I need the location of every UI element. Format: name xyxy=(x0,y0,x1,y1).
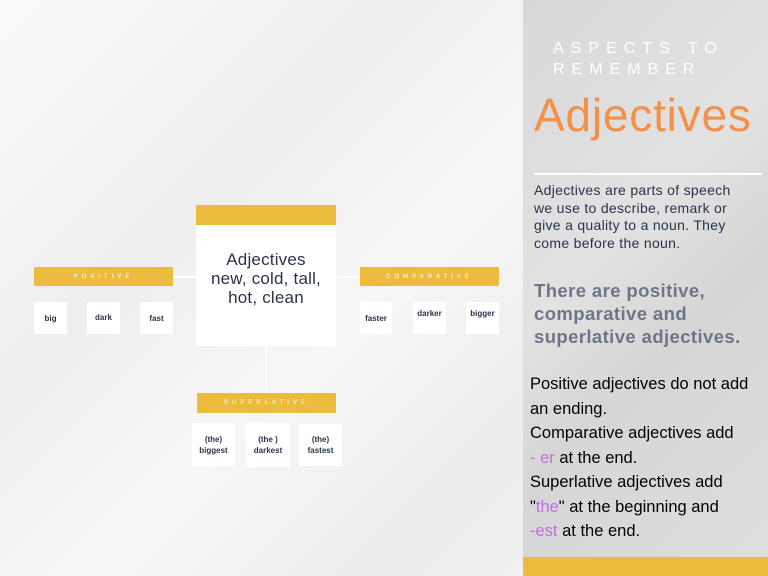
center header bar xyxy=(196,205,336,225)
definition: we use to describe, remark or xyxy=(534,200,727,216)
positive: fast xyxy=(140,302,173,334)
superlative label xyxy=(197,393,336,413)
positive: big: big xyxy=(44,314,56,322)
types statement xyxy=(534,280,741,347)
rules: Comparative adjectives add xyxy=(530,424,734,442)
comparative: darker xyxy=(413,302,446,334)
center text xyxy=(211,250,321,307)
comparative label: COMPARATIVE xyxy=(386,274,473,280)
divider xyxy=(534,173,762,175)
superlative label: SUPERLATIVE xyxy=(224,400,309,406)
comparative: bigger: bigger xyxy=(470,309,495,318)
types statement: There are positive, xyxy=(534,280,705,301)
definition: come before the noun. xyxy=(534,234,680,250)
superlative: biggest xyxy=(192,423,235,466)
center text: new, cold, tall, xyxy=(211,269,321,288)
center card xyxy=(196,205,336,346)
comparative: darker: darker xyxy=(417,309,442,318)
subtitle: ASPECTS TO xyxy=(553,40,724,57)
right panel xyxy=(523,0,768,576)
types statement: superlative adjectives. xyxy=(534,326,741,347)
subtitle xyxy=(553,40,724,78)
superlative: fastest: (the) xyxy=(312,435,329,444)
rules: -est at the end. xyxy=(530,522,640,540)
superlative: biggest: (the) xyxy=(205,434,222,444)
rules: "the" at the beginning and xyxy=(530,498,719,516)
comparative: faster: faster xyxy=(365,314,387,323)
connector: right xyxy=(336,276,360,278)
comparative label xyxy=(360,267,499,286)
positive: big xyxy=(34,302,67,334)
superlative: fastest: fastest xyxy=(308,446,333,455)
comparative: bigger xyxy=(466,302,499,334)
definition: Adjectives are parts of speech xyxy=(534,182,731,198)
superlative: darkest: darkest xyxy=(254,446,282,455)
superlative: biggest: biggest xyxy=(199,446,228,454)
rules: - er at the end. xyxy=(530,448,637,466)
connector: down xyxy=(265,346,267,393)
center text: hot, clean xyxy=(228,288,304,307)
rules: Positive adjectives do not add xyxy=(530,375,748,393)
center text: Adjectives xyxy=(226,250,306,269)
definition: give a quality to a noun. They xyxy=(534,217,726,233)
connector: left xyxy=(173,276,196,278)
superlative: fastest xyxy=(299,424,342,466)
positive label xyxy=(34,267,173,286)
superlative: darkest xyxy=(246,423,290,467)
rules: an ending. xyxy=(530,400,607,418)
positive: fast: fast xyxy=(149,314,164,322)
positive label: POSITIVE xyxy=(74,274,133,280)
rules xyxy=(530,375,748,540)
subtitle: REMEMBER xyxy=(553,61,701,78)
positive: dark xyxy=(87,302,120,334)
definition xyxy=(534,182,731,250)
superlative: darkest: (the ) xyxy=(258,435,278,444)
title: Adjectives xyxy=(534,89,752,141)
positive: dark: dark xyxy=(95,313,112,322)
comparative: faster xyxy=(360,302,392,334)
rules: Superlative adjectives add xyxy=(530,473,723,491)
bottom bar xyxy=(523,557,768,576)
types statement: comparative and xyxy=(534,303,687,324)
